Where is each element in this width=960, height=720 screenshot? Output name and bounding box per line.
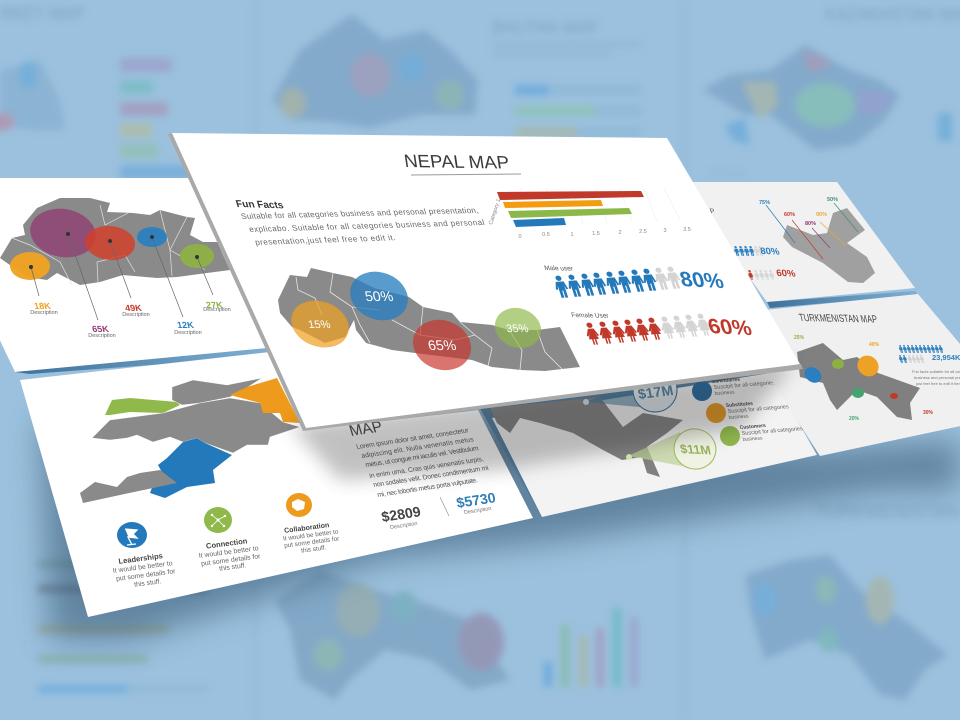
provinces stats — [380, 490, 497, 531]
Fun Facts text: Suitable for all categories business and personal presentation, — [240, 206, 480, 221]
provinces stats: $2809 — [380, 504, 422, 526]
China percent labels: 80% — [805, 221, 816, 227]
China percent labels: 90% — [816, 212, 827, 218]
background: Turkey slide bars — [0, 3, 190, 179]
provinces stats: $5730 — [455, 490, 497, 512]
Female user row — [571, 312, 754, 345]
background: bar chart — [544, 608, 638, 687]
Turkmenistan labels: 30% — [923, 410, 934, 416]
China user stats: 60% — [775, 268, 797, 280]
title: NEPAL MAP — [403, 151, 511, 173]
legend items: business — [742, 435, 764, 443]
Bhutan value labels: Description — [203, 307, 231, 313]
map: blue region — [150, 438, 232, 498]
provinces heading and text: adipiscing elit. Nulla venenatis metus — [361, 436, 475, 460]
Bhutan region bubbles — [10, 204, 214, 320]
item: Connection: put some details for — [201, 553, 262, 568]
Bhutan value labels — [30, 300, 231, 339]
Turkmenistan bubbles — [802, 351, 898, 399]
China percent labels: 75% — [759, 200, 770, 206]
item: Leaderships — [112, 522, 177, 589]
Fun Facts heading: Fun Facts — [235, 199, 285, 211]
Turkmenistan labels: 40% — [869, 342, 880, 348]
China percent labels: 50% — [827, 197, 838, 203]
provinces heading and text: mi, nec lobortis metus porta vulputate. — [377, 477, 479, 499]
legend items: Sanctuaries — [711, 377, 741, 385]
item: Connection: Connection — [205, 536, 248, 551]
Turkmenistan heading: TURKMENISTAN MAP — [798, 312, 879, 326]
Nepal map shape — [278, 268, 580, 371]
shadow of main slide — [290, 362, 795, 480]
item: Connection: It would be better to — [198, 545, 259, 560]
background: Bhutan slide map — [272, 14, 642, 137]
provinces heading and text: in enim urna. Cras quis venenatis turpis, — [369, 456, 485, 480]
item: Collaboration: put some details for — [284, 535, 341, 550]
map: grey regions — [92, 378, 300, 453]
slide: China map — [680, 182, 918, 308]
$11M callout: $11M — [679, 442, 712, 457]
Turkmenistan users: 23,954K — [932, 353, 960, 362]
Male user row: Male user — [544, 265, 575, 273]
Female user row: 60% — [705, 314, 754, 340]
Male user row — [544, 265, 726, 298]
provinces heading and text: MAP — [347, 418, 385, 440]
item: Collaboration: Collaboration — [284, 522, 330, 535]
legend items: business — [714, 389, 736, 397]
$11M callout — [626, 424, 720, 474]
Nepal bubbles: 15% — [307, 319, 332, 331]
bar chart: 2.5 — [639, 229, 647, 235]
Fun Facts text: explicabo. Suitable for all categories business and personal — [248, 218, 486, 234]
$17M callout — [583, 368, 677, 412]
Female user row: Female User — [571, 312, 610, 320]
Fun Facts text — [240, 206, 486, 247]
Nepal bubbles — [285, 264, 546, 377]
title underline — [411, 174, 521, 175]
bar chart — [488, 188, 691, 240]
bar chart: 3.5 — [683, 227, 691, 233]
item: Leaderships: put some details for — [116, 568, 177, 583]
Male user row: 80% — [677, 267, 726, 293]
provinces heading and text: metus, ut congue mi iaculis vel. Vestibulum — [365, 445, 480, 469]
legend items: Substitutes — [725, 401, 754, 409]
Bhutan value labels: 65K — [91, 324, 110, 334]
legend items: Suscipit for all categories — [741, 426, 804, 437]
map: orange region — [230, 378, 300, 423]
China leader lines — [766, 203, 858, 259]
slide: Bhutan map — [0, 178, 290, 374]
background: lower-left user rows — [38, 560, 210, 693]
Fun Facts text: presentation,just feel free to edit it. — [254, 233, 397, 247]
item: Leaderships: Leaderships — [118, 551, 163, 566]
map: green region — [105, 398, 180, 415]
legend items: Suscipit for all categories — [727, 404, 790, 415]
band under China slide — [767, 291, 918, 308]
background: Turkmenistan slide map — [745, 501, 960, 700]
item: Collaboration: this stuff. — [301, 544, 327, 555]
bar chart: Category 1 — [488, 198, 502, 226]
provinces heading and text: non sodales velit. Donec condimentum mi — [373, 465, 490, 489]
Bhutan value labels: 27K — [205, 300, 224, 310]
Bhutan value labels: Description — [122, 312, 150, 318]
provinces heading and text: Lorem ipsum dolor sit amet, consectetur — [356, 427, 470, 451]
bar chart: 1.5 — [592, 231, 600, 237]
Bhutan value labels: Description — [30, 310, 58, 316]
Bhutan value labels: 49K — [124, 303, 143, 313]
item: Connection — [198, 507, 262, 573]
Bhutan value labels: Description — [88, 333, 116, 339]
Nepal bubbles: 50% — [363, 288, 395, 304]
provinces stats: Description — [463, 506, 492, 516]
background: Turkey slide bars: RKEY MAP — [0, 3, 85, 25]
legend items — [692, 377, 804, 446]
Bhutan value labels: 12K — [176, 320, 195, 330]
China heading: AP — [704, 207, 716, 215]
Bhutan value labels: Description — [174, 330, 202, 336]
Turkmenistan labels: 25% — [794, 335, 805, 341]
background: lower-middle map — [275, 570, 510, 700]
background: Kazakhstan slide map — [703, 4, 960, 178]
$17M callout: $17M — [637, 383, 675, 403]
map: grey south region — [80, 470, 177, 503]
bar chart: 0 — [518, 234, 522, 240]
China user stats — [733, 246, 797, 280]
legend items: business — [728, 413, 750, 421]
Nepal bubbles: 65% — [426, 337, 458, 353]
item: Leaderships: It would be better to — [112, 560, 173, 575]
Bhutan value labels: 18K — [33, 301, 52, 311]
Turkmenistan labels: 20% — [849, 416, 860, 422]
bar chart: 0.5 — [542, 232, 550, 238]
Bhutan map shape — [0, 198, 230, 285]
legend items: Suscipit for all categories — [713, 380, 776, 391]
slide: $11M map — [478, 368, 817, 517]
provinces stats: Description — [389, 521, 418, 531]
item: Connection: this stuff. — [219, 562, 247, 573]
bar chart: 1 — [570, 232, 574, 238]
China user stats: 80% — [759, 246, 781, 258]
main slide: Nepal map — [168, 133, 803, 431]
slide: provinces map — [20, 352, 533, 617]
legend items: Customers — [739, 423, 767, 431]
shadow under floating slides — [40, 420, 960, 640]
background: Kazakhstan slide map: Fun Facts — [710, 169, 746, 178]
slide edge — [168, 133, 803, 431]
bar chart: 3 — [663, 228, 667, 234]
bar chart: 2 — [618, 230, 622, 236]
China percent labels — [759, 197, 838, 227]
slide: Turkmenistan map — [765, 294, 960, 456]
Turkmenistan users — [898, 345, 960, 386]
item: Leaderships: this stuff. — [134, 578, 162, 589]
Nepal bubbles: 35% — [505, 323, 530, 335]
dark map — [490, 397, 683, 477]
Turkmenistan map shape — [797, 343, 920, 420]
background: Bhutan slide map: BHUTAN MAP — [492, 18, 598, 39]
provinces heading and text — [347, 418, 490, 499]
item: Collaboration — [283, 493, 341, 555]
band under Bhutan slide — [15, 348, 272, 374]
China percent labels: 60% — [784, 212, 795, 218]
China map shape — [783, 208, 875, 283]
item: Collaboration: It would be better to — [283, 528, 339, 543]
Turkmenistan labels — [794, 335, 934, 422]
